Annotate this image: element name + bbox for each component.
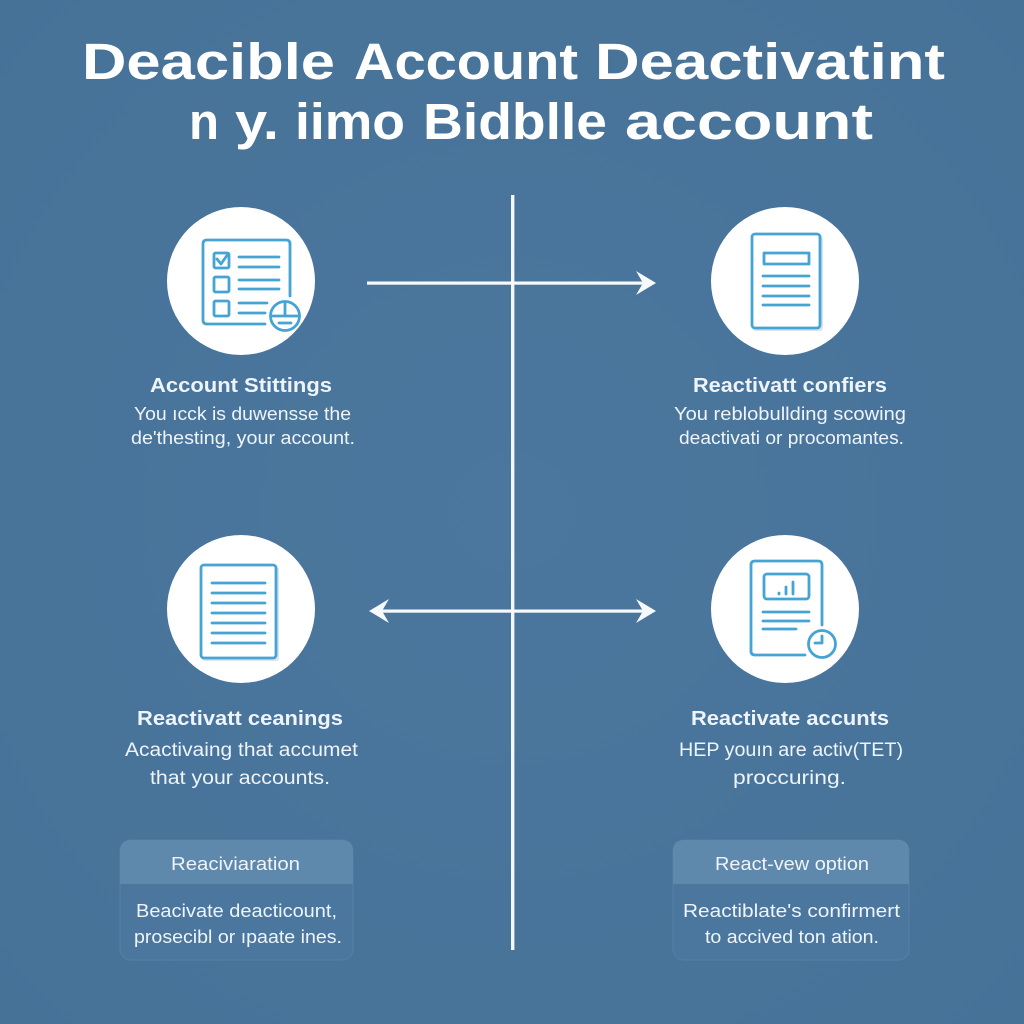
title: Deacible [82, 33, 335, 90]
title: n [189, 93, 219, 150]
text block [679, 740, 903, 789]
heading: Reactivatt confiers [693, 375, 887, 397]
panel: reactivating meanings [125, 535, 359, 789]
text block [674, 404, 906, 448]
text block [131, 404, 355, 448]
heading: Reactivatt ceanings [137, 708, 343, 730]
title: Account [354, 33, 578, 90]
text block: HEP youın are activ(TET) [679, 740, 903, 761]
heading: Account Stittings [150, 375, 332, 397]
callout heading: Reaciviaration [171, 853, 300, 874]
vertical divider line [511, 195, 514, 950]
callout text: prosecibl or ıpaate ines. [134, 926, 342, 947]
arrow: bottom double-headed [369, 599, 656, 623]
title [82, 33, 945, 150]
callout text [683, 900, 900, 947]
title: account [625, 93, 873, 150]
icon: report with clock [711, 535, 859, 683]
text block: proccuring. [733, 768, 846, 789]
title: y. [235, 93, 279, 150]
icon: checklist with globe [167, 207, 315, 355]
callout: react-view option [673, 840, 909, 960]
text block: You ıcck is duwensse the [134, 404, 351, 424]
text block: deactivati or procomantes. [679, 428, 904, 448]
text block: that your accounts. [150, 768, 330, 789]
panel: reactivate accounts [679, 535, 903, 789]
callout: reactivation [120, 840, 353, 960]
panel: account settings [131, 207, 355, 448]
panel: reactivate confirmation [674, 207, 906, 448]
title: iimo [295, 93, 405, 150]
text block: de'thesting, your account. [131, 428, 355, 448]
callout text: Reactiblate's confirmert [683, 900, 900, 921]
arrow: top right-pointing [367, 271, 656, 295]
callout text: to accived ton ation. [705, 926, 879, 947]
heading: Reactivate accunts [691, 708, 889, 730]
title: Deactivatint [595, 33, 945, 90]
callout text: Beacivate deacticount, [136, 900, 337, 921]
title: Bidblle [423, 93, 607, 150]
text block: Acactivaing that accumet [125, 740, 359, 761]
callout heading: React-vew option [715, 853, 869, 874]
text block: You reblobullding scowing [674, 404, 906, 424]
icon: text page [167, 535, 315, 683]
text block [125, 740, 359, 789]
callout text [134, 900, 342, 947]
icon: document [711, 207, 859, 355]
